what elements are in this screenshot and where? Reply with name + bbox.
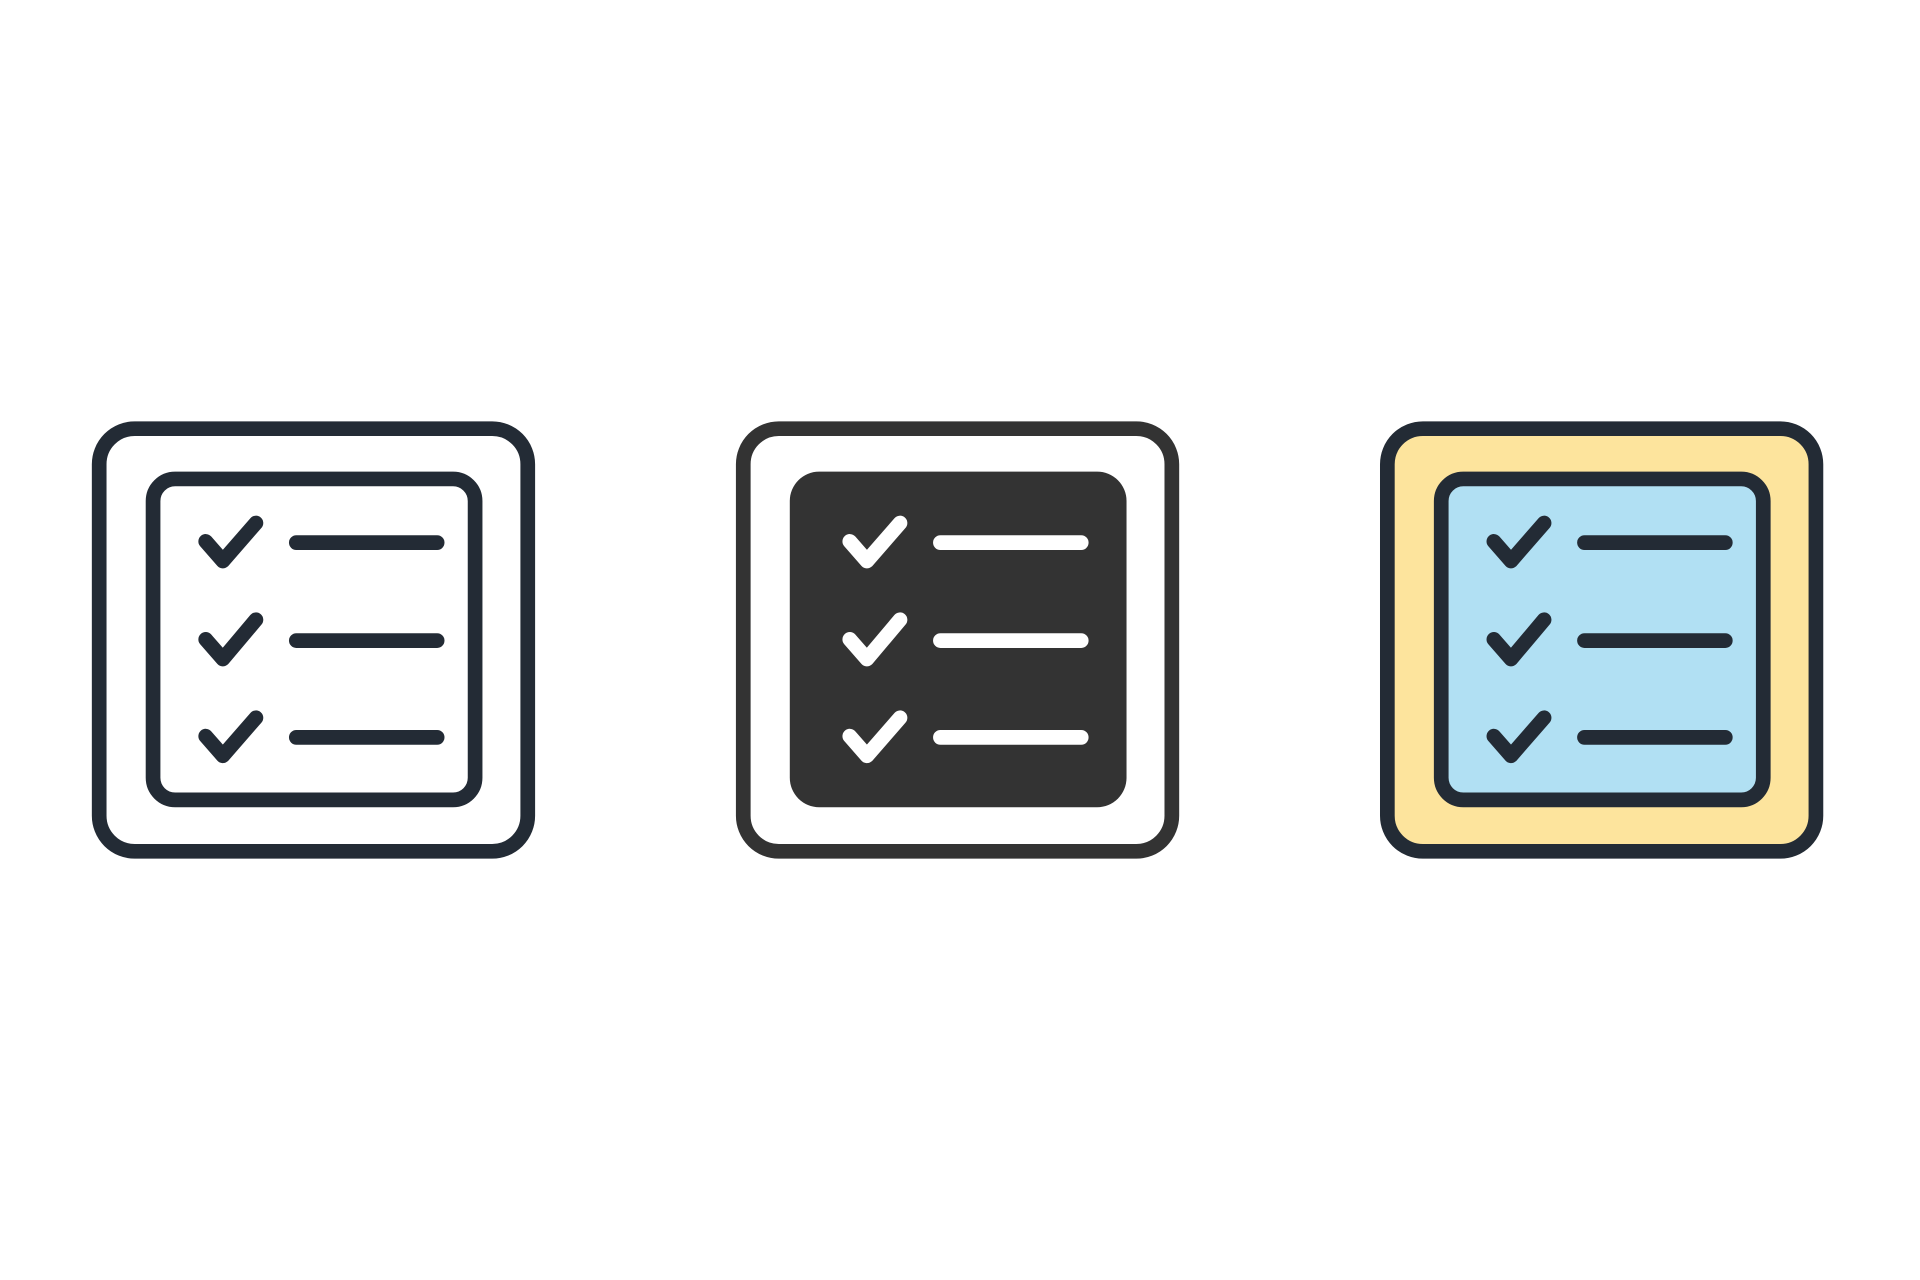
icon: filled checklist	[743, 429, 1172, 851]
icon: outline checklist	[99, 429, 528, 851]
icon: colored checklist	[1387, 429, 1816, 851]
